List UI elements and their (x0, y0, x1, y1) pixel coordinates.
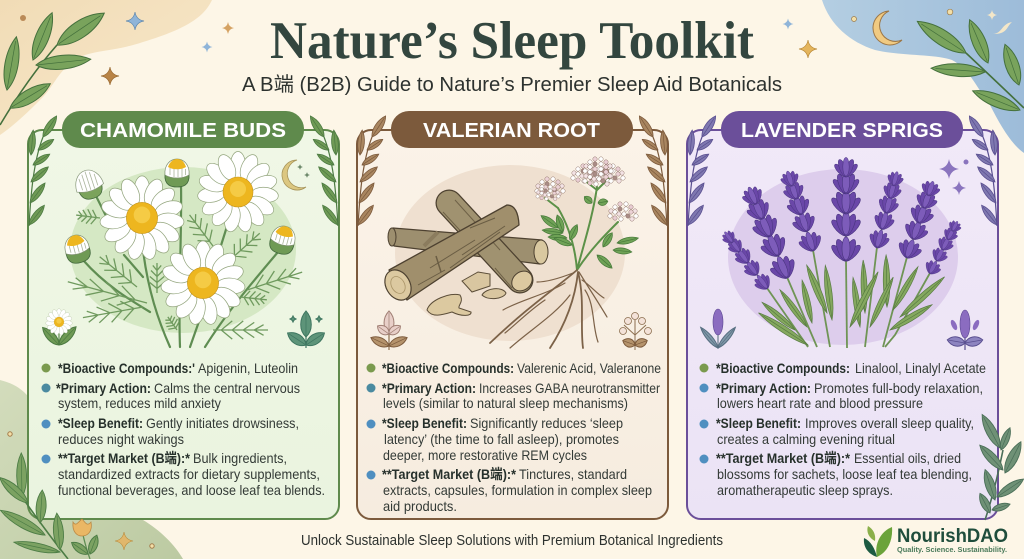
icon: small cluster sprig (620, 312, 652, 350)
heading pill: lavender (721, 111, 963, 148)
bullets: chamomile: system, reduces mild anxiety (58, 395, 221, 411)
bullets: valerian: Valerenic Acid, Valeranone (517, 360, 661, 376)
laurel: lavender (685, 114, 1000, 227)
bullets: lavender: Linalool, Linalyl Acetate (855, 360, 986, 376)
bullets: chamomile: Calms the central nervous (154, 380, 300, 396)
footer tagline: Unlock Sustainable Sleep Solutions with Premium Botanical Ingredients (301, 533, 723, 549)
bullets: lavender (700, 360, 986, 498)
bullets: valerian: Tinctures, standard (519, 466, 627, 482)
bullets: lavender: Promotes full-body relaxation, (814, 380, 983, 396)
icon: pink flower sprig (369, 311, 409, 350)
bullets: lavender: *Primary Action: (716, 380, 811, 396)
bullets: chamomile: Apigenin, Luteolin (198, 360, 298, 376)
heading pill: valerian (391, 111, 633, 148)
icon: lavender bud (946, 310, 984, 350)
bullets: valerian: *Bioactive Compounds: (382, 360, 514, 376)
background blob: bottom left (0, 380, 183, 559)
bullets: chamomile: *Primary Action: (56, 380, 151, 396)
bullets: chamomile: Gently initiates drowsiness, (146, 415, 299, 431)
icon: logo leaves (864, 526, 892, 557)
logo: NourishDAO (864, 525, 1008, 557)
bullets: lavender: Essential oils, dried (854, 450, 961, 466)
bullets: chamomile: standardized extracts for dietary supplements, (58, 466, 320, 482)
subtitle: A B端 (B2B) Guide to Nature’s Premier Sleep Aid Botanicals (242, 73, 782, 96)
illustration: lavender bouquet (717, 158, 966, 348)
bullets: valerian: *Primary Action: (382, 380, 476, 396)
bullets: chamomile: **Target Market (B端):* (58, 450, 190, 466)
bullets: valerian: **Target Market (B端):* (382, 466, 516, 482)
heading pill: valerian: VALERIAN ROOT (423, 119, 600, 142)
background blob: top right (822, 0, 1024, 153)
sprig: bottom left (0, 453, 68, 559)
bullets: lavender: *Bioactive Compounds: (716, 360, 850, 376)
bullets: lavender: aromatherapeutic sleep sprays. (717, 482, 893, 498)
bullets: valerian (366, 360, 661, 514)
header sparkles (20, 9, 1012, 85)
bullets: valerian: aid products. (383, 498, 457, 514)
laurel: valerian (355, 114, 670, 227)
icon: small flower (40, 309, 79, 348)
valerian plant (490, 157, 639, 348)
bullets: lavender: lowers heart rate and blood pressure (717, 395, 923, 411)
sprig: top right (913, 15, 1024, 116)
heading pill: chamomile (62, 111, 304, 148)
icon: moon, top right (873, 11, 902, 45)
laurel: chamomile (26, 114, 341, 227)
sparkles: lavender (939, 159, 968, 195)
bullets: valerian: Significantly reduces ‘sleep (470, 415, 623, 431)
bullets: lavender: blossoms for sachets, loose leaf tea blending, (717, 466, 972, 482)
background blob: top left (0, 0, 212, 135)
illustration: valerian roots and plant (380, 157, 639, 348)
logo: NourishDAO: NourishDAO (897, 525, 1008, 547)
sprig: bottom right (976, 412, 1024, 520)
icon: small lavender sprig (699, 309, 737, 350)
bullets: chamomile: *Sleep Benefit: (58, 415, 143, 431)
bullets: chamomile: reduces night wakings (58, 431, 184, 447)
panel: lavender sprigs (685, 111, 1000, 519)
bullets: valerian: *Sleep Benefit: (382, 415, 467, 431)
sprig: top left (0, 6, 109, 125)
bullets: valerian: deeper, more restorative REM cycles (383, 447, 587, 463)
icon: crescent moon (282, 160, 310, 190)
panel: chamomile buds (26, 111, 341, 519)
illustration: chamomile plant (62, 152, 305, 347)
bullets: chamomile: functional beverages, and loose leaf tea blends. (58, 482, 325, 498)
bullets: valerian: extracts, capsules, formulation in complex sleep (383, 482, 652, 498)
bullets: lavender: **Target Market (B端):* (716, 450, 850, 466)
bullets: lavender: Improves overall sleep quality, (805, 415, 974, 431)
title: Nature’s Sleep Toolkit (270, 12, 754, 70)
bullets: chamomile: *Bioactive Compounds:' (58, 360, 195, 376)
bullets: valerian: levels (similar to natural sleep mechanisms) (383, 395, 628, 411)
bullets: valerian: Increases GABA neurotransmitter (479, 380, 660, 396)
flower and sparkle: bottom left (8, 432, 154, 559)
heading pill: lavender: LAVENDER SPRIGS (741, 119, 943, 142)
bullets: valerian: latency’ (the time to fall asleep), promotes (384, 431, 619, 447)
bullets: chamomile (42, 360, 325, 498)
bullets: lavender: *Sleep Benefit: (716, 415, 801, 431)
bullets: lavender: creates a calming evening ritual (717, 431, 895, 447)
icon: teal sprout (285, 311, 327, 349)
bullets: chamomile: Bulk ingredients, (193, 450, 287, 466)
root pieces (380, 200, 548, 315)
heading pill: chamomile: CHAMOMILE BUDS (80, 119, 286, 142)
logo: NourishDAO: Quality. Science. Sustainability. (897, 545, 1007, 554)
panel: valerian root (355, 111, 670, 519)
